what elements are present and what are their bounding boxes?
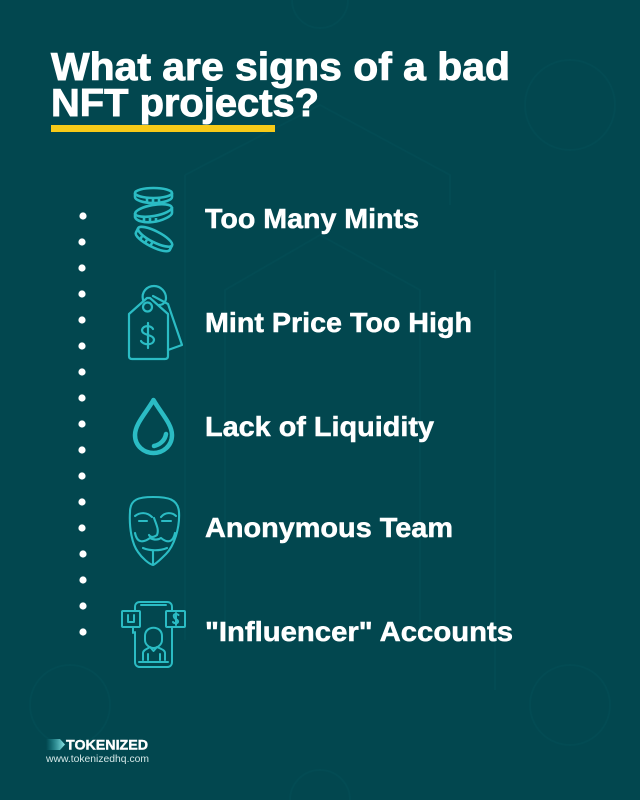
logo: TOKENIZED xyxy=(66,736,148,752)
dotted timeline xyxy=(78,212,87,636)
website url: www.tokenizedhq.com xyxy=(45,753,149,765)
icon: water drop xyxy=(135,400,172,453)
item 5 label: "Influencer" Accounts xyxy=(205,616,513,647)
title xyxy=(51,46,510,125)
icon: influencer phone xyxy=(122,602,185,667)
title: NFT projects? xyxy=(51,82,319,125)
item 1 label: Too Many Mints xyxy=(205,203,419,234)
icon: mask xyxy=(130,497,179,565)
item 4 label: Anonymous Team xyxy=(205,512,453,543)
title: What are signs of a bad xyxy=(51,46,510,89)
item 3 label: Lack of Liquidity xyxy=(205,411,435,442)
title underline xyxy=(51,125,275,132)
icon: price tags xyxy=(129,286,182,359)
icon: coins xyxy=(133,188,175,255)
item 2 label: Mint Price Too High xyxy=(205,307,472,338)
